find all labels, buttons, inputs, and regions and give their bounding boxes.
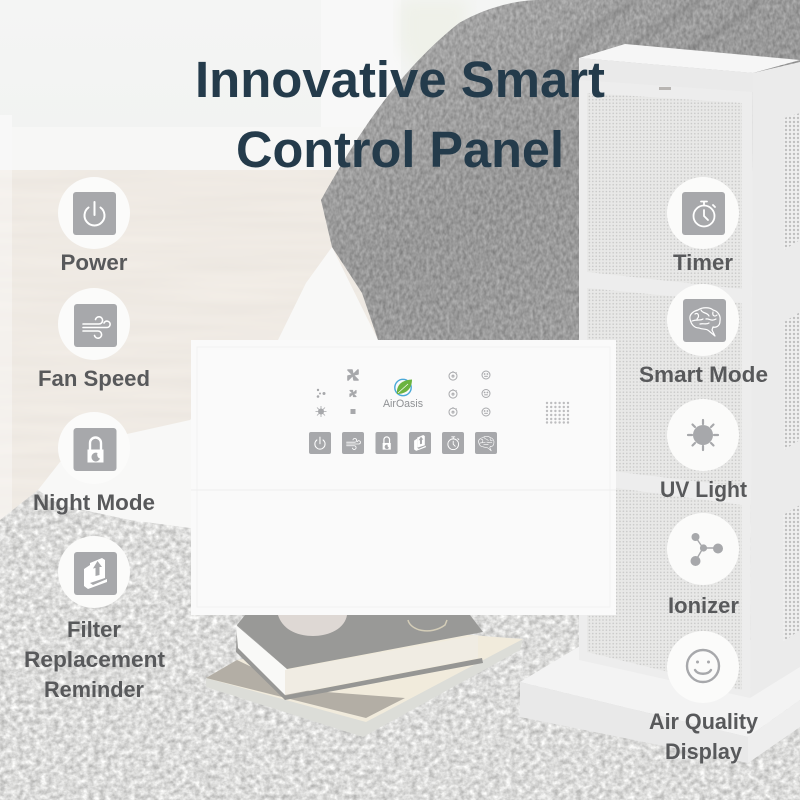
feature: Air Quality Display: Display	[665, 739, 743, 764]
side mesh panels	[784, 113, 800, 250]
wall and window	[0, 0, 800, 200]
feature: Smart Mode: Smart Mode	[639, 362, 768, 387]
title	[195, 51, 605, 178]
logo: AirOasis	[383, 379, 423, 410]
feature: Night Mode	[33, 412, 155, 515]
feature: Power: Power	[60, 250, 128, 275]
status icons: timers	[449, 371, 457, 416]
tower body	[579, 58, 753, 698]
magazine	[206, 632, 523, 737]
feature: Power	[58, 177, 130, 275]
panel button row	[309, 432, 497, 454]
front mesh panels	[587, 93, 742, 289]
speaker dots	[546, 402, 569, 424]
carpet	[0, 490, 800, 800]
status icons: ionizer and uv	[316, 389, 326, 417]
feature: Ionizer: Ionizer	[668, 593, 739, 618]
feature: UV Light	[660, 399, 748, 502]
glasses	[408, 620, 447, 631]
beige floor	[0, 170, 420, 530]
lower book	[236, 625, 287, 700]
status icons: fan speed	[348, 370, 358, 414]
feature: Ionizer	[667, 513, 739, 618]
panel: control panel product	[191, 340, 616, 615]
feature: Filter Replacement Reminder: Filter	[67, 617, 121, 642]
feature: Fan Speed	[38, 288, 150, 391]
feature: Smart Mode	[639, 284, 768, 387]
logo: AirOasis: AirOasis	[383, 398, 423, 410]
white pillow	[38, 247, 400, 528]
feature: Filter Replacement Reminder	[24, 536, 166, 702]
feature: Filter Replacement Reminder: Replacement	[24, 647, 166, 672]
title: Control Panel	[236, 121, 564, 178]
feature: Filter Replacement Reminder: Reminder	[44, 677, 144, 702]
plinth	[520, 640, 800, 737]
status icons: air quality	[482, 371, 490, 416]
books	[206, 615, 523, 737]
title: Innovative Smart	[195, 51, 605, 108]
feature: Air Quality Display	[649, 631, 759, 764]
feature: UV Light: UV Light	[660, 477, 748, 502]
feature: Air Quality Display: Air Quality	[649, 709, 759, 734]
feature: Fan Speed: Fan Speed	[38, 366, 150, 391]
feature: Night Mode: Night Mode	[33, 490, 155, 515]
grey blanket	[321, 0, 800, 340]
purifier tower	[520, 44, 800, 763]
feature: Timer: Timer	[673, 250, 733, 275]
bowl	[278, 615, 347, 636]
feature: Timer	[667, 177, 739, 275]
